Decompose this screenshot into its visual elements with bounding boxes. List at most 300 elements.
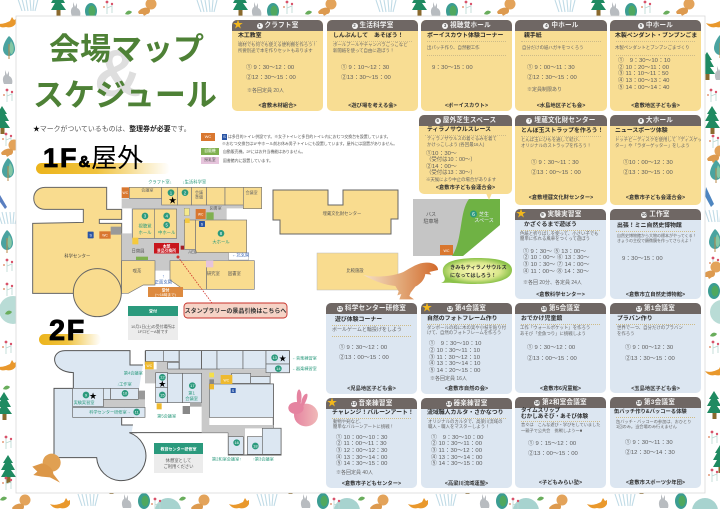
panel: 12 fourth meeting room: ③ 11：30～12：10 (429, 355, 480, 361)
panel: 8 large hall: ドッチビーディスクを使用して「ディスゲッ (615, 137, 701, 142)
panel: 16 second Japanese room: 16 (535, 400, 540, 404)
panel: 15 fifth meeting room: 第5会議室 (549, 305, 580, 312)
room labels: 視聴覚 (139, 222, 152, 229)
panel: 14 instrument room: ② 10：30～11：00 (431, 441, 482, 447)
1F: prize exchange box: 本部 (163, 244, 170, 248)
panel: 10 workshop: 10 (642, 212, 647, 216)
panel: 12 fourth meeting room: ダンボールの枠に木の実や小枝を貼り付 (427, 325, 506, 330)
numbered rooms: 17 (190, 383, 195, 388)
WC and facilities: S (89, 234, 92, 238)
room labels: 準備 (195, 194, 203, 200)
legend: は多目的トイレ併設です。※女子トイレと多目的トイレ内におむつ交換台を設置しています。 (228, 134, 391, 139)
callout: stamp rally: スタンプラリーの景品引換はこちらへ (185, 307, 286, 315)
panel: 18 third meeting room: <倉敷市スポーツ少年団> (626, 480, 685, 486)
room labels: 中ホール (158, 229, 176, 236)
heading: 2F (39, 315, 100, 347)
WC and facilities (88, 187, 249, 267)
panel: 1 craft room: 所要別途で本を作りセットもあります (238, 48, 313, 53)
panel: 11 science center training room: 遊び体験コーナー (335, 317, 382, 323)
panel: 6 outdoor lawn: （受付は13：30～） (426, 170, 476, 176)
panel: 12 fourth meeting room: ④ 13：30～14：10 (429, 361, 480, 367)
room labels: 第2和室会議室↑ (212, 456, 241, 462)
panel: 7 buried cultural property center: 7 (528, 118, 531, 122)
panel: 17 first meeting room: ②13：30～15：00 (625, 356, 675, 362)
panel: 14 instrument room: 流域職人カルタ・さかなつり (427, 410, 504, 416)
panel: 12 fourth meeting room: 第4会議室 (455, 305, 486, 312)
panel: 4 middle hall: ②12：30～15：00 (527, 75, 577, 81)
right strip (706, 17, 720, 27)
1F: reception note: 1FロビーA前です (138, 329, 168, 334)
legend: WC (205, 134, 211, 139)
map: outdoor lawn and bus parking: スペース (474, 218, 494, 224)
panel: 5 middle hall: 中ホール (646, 22, 673, 29)
panel: 16 second Japanese room: <子どもみらい塾> (539, 480, 582, 486)
panel: 9 experiment room: かざぐるまで遊ぼう (524, 222, 577, 228)
WC and facilities: WC (102, 234, 108, 238)
panel: 16 second Japanese room: 昔々は こんな遊び・学びをしていました (521, 422, 600, 427)
panel: 6 outdoor lawn (419, 115, 512, 200)
legend: 自動販売機。2Fにはお弁当機能はありません。 (223, 149, 305, 154)
map: outdoor lawn and bus parking: WC (444, 249, 450, 253)
panel: 13 music room: 動物や剣など、 (333, 419, 364, 424)
panel: 8 large hall (610, 115, 701, 205)
panel: 17 first meeting room (610, 303, 701, 393)
room labels (64, 178, 258, 285)
panel: 14 instrument room: ⑤ 14：30～15：00 (431, 461, 482, 467)
panel: 2 life science room: 新聞紙を使って自由に遊ぼう！ (333, 48, 394, 53)
panel: 13 music room: ② 11：00～11：30 (336, 441, 387, 447)
panel: 12 fourth meeting room: ★ (422, 303, 432, 314)
panel: 3 audiovisual hall: ボーイスカウト体験コーナー (427, 33, 503, 39)
panel: 12 fourth meeting room: <倉敷市自然の会> (445, 386, 488, 392)
room labels: 日替展 (132, 248, 145, 255)
left strip (0, 17, 16, 27)
panel: 8 large hall: <倉敷市子ども会連合会> (626, 195, 685, 201)
building: 埋蔵文化財センター (273, 190, 398, 234)
room labels: ↑第3会議室 (253, 456, 274, 462)
room labels: 会議室 (141, 186, 153, 192)
2F: rest room note: 教育センター研修室 (160, 446, 196, 452)
panel: 13 music room: ⑤ 14：30～15：00 (336, 461, 387, 467)
numbered rooms: 3 (144, 214, 147, 219)
panel: 16 second Japanese room: ① 9：15～12：00 (528, 441, 576, 447)
panel: 8 large hall: 8 (640, 118, 642, 122)
panel: 11 science center training room: ボールゲームと輪投げをしよう (332, 327, 402, 333)
numbered rooms: 4 (165, 214, 168, 219)
panel: 12 fourth meeting room: ② 10：30～11：10 (429, 348, 480, 354)
panel: 13 music room: ★ (327, 398, 337, 409)
panel: 10 workshop: <倉敷市立自然史博物館> (626, 292, 685, 298)
panel: 15 fifth meeting room: <倉敷市6児童館> (540, 386, 581, 392)
WC and facilities: S (232, 389, 235, 393)
map: outdoor lawn and bus parking: 6 (472, 212, 475, 218)
numbered rooms: ★ (89, 392, 97, 401)
panel: 17 first meeting room: を作ろう (617, 331, 635, 336)
panel: 1 craft room: クラフト室 (265, 22, 298, 29)
numbered rooms: ★ (169, 196, 177, 205)
panel: 16 second Japanese room: 第2和室会議室 (542, 399, 587, 406)
panel: 13 music room: <倉敷市子どもセンター> (342, 481, 401, 487)
panel: 1 craft room: 1 (258, 22, 261, 28)
panel: 13 music room: 音楽練習室 (359, 400, 392, 407)
panel: 9 experiment room: ★ (516, 209, 526, 220)
panel: 9 experiment room (515, 209, 606, 299)
title: ampersand watermark: & (94, 36, 142, 110)
panel: 4 middle hall: 親手紙 (524, 33, 542, 39)
panel: 5 middle hall: <倉敷地区子ども会> (631, 103, 680, 109)
speech bubble (441, 258, 512, 284)
science center wing (33, 187, 122, 317)
panel: 12 fourth meeting room (421, 303, 512, 394)
numbered rooms: 2 (184, 190, 187, 195)
numbered rooms: 13 (272, 355, 278, 360)
1F: reception box: (～16時まで) (155, 292, 176, 297)
room labels: 図書室 (210, 204, 222, 210)
panel: 4 middle hall (515, 20, 607, 111)
panel: 6 outdoor lawn: （受付は10：00～） (426, 157, 476, 163)
panel: 1 craft room: ※各回定員 20人 (247, 88, 284, 94)
panel: 5 middle hall: ④ 13：00～13：40 (618, 78, 669, 84)
1F: reception note: 受付 (149, 308, 157, 314)
panel: 15 fifth meeting room: 15 (541, 306, 546, 310)
panel: 1 craft room: 端材でも何でも使える便利棚を作ろう！ (238, 42, 317, 47)
panel: 2 life science room: 生活科学室 (360, 22, 393, 29)
panel: 2 life science room: ボールプールやチャンバラごっこなど (333, 42, 408, 47)
room labels (74, 354, 317, 462)
panel: 17 first meeting room: プラバン作り (617, 316, 653, 322)
panel: 9 experiment room: 9 (541, 212, 544, 216)
panel: 12 fourth meeting room: 自然のフォトフレーム作り (427, 316, 498, 322)
WC and facilities (138, 362, 236, 414)
room labels: 喫茶 (133, 267, 142, 274)
room labels: 大ホール (212, 238, 230, 245)
panel: 10 workshop: 自然史博物館から大物の標本がやってくる！ (617, 233, 697, 238)
panel: 9 experiment room: 簡単に作れる風車をつくって遊ぼう (520, 236, 590, 241)
panel: 15 fifth meeting room: ②13：00～15：00 (527, 356, 577, 362)
title: 会場マップ: 会場マップ (49, 32, 204, 67)
panel: 7 buried cultural property center: <倉敷埋蔵文化財センター> (529, 195, 593, 201)
panel: 11 science center training room: ① 9：30～12：00 (339, 345, 387, 351)
WC and facilities: WC (147, 364, 153, 368)
panel: 18 third meeting room: ②12：30～14：30 (625, 450, 675, 456)
numbered rooms: 11 (135, 409, 140, 414)
numbered rooms: 9 (85, 392, 88, 397)
callout: stamp rally (184, 303, 287, 318)
map: outdoor lawn and bus parking: バス (426, 212, 436, 218)
panel: 3 audiovisual hall (421, 20, 512, 111)
panel: 14 instrument room: ① 9：30～10：00 (431, 435, 483, 441)
numbered rooms: 8 (220, 231, 223, 236)
panel: 1 craft room: ① 9：30～12：00 (246, 65, 294, 71)
1F: reception box (148, 287, 183, 297)
speech bubble: になってはしろう！ (450, 272, 496, 279)
panel: 8 large hall: ニュースポーツ体験 (615, 128, 668, 134)
panel: 13 music room: ① 10：00～10：30 (336, 435, 387, 441)
panel: 13 music room: ※各回定員 40人 (336, 470, 373, 476)
panel: 6 outdoor lawn: ①10：30～ (426, 151, 457, 157)
numbered rooms (142, 189, 224, 237)
panel: 3 audiovisual hall: 視聴覚ホール (450, 22, 491, 29)
panel: 6 outdoor lawn: 6 (436, 118, 439, 122)
panel: 3 audiovisual hall: 3 (444, 22, 446, 28)
legend (201, 133, 397, 164)
room labels: AED (188, 249, 197, 254)
2F: rest room note: 休憩室として (166, 457, 191, 464)
panel: 3 audiovisual hall: <ボーイスカウト> (445, 103, 488, 109)
numbered rooms: ★ (279, 354, 287, 363)
panel: 6 outdoor lawn: 屋外芝生スペース (443, 117, 496, 124)
panel: 9 experiment room: ② 10：00～ ⑥ 13：30～ (523, 255, 589, 261)
panel: 12 fourth meeting room: ※各回定員 16人 (430, 376, 467, 382)
room labels: 第1 (188, 390, 196, 396)
numbered rooms: 15 (160, 392, 165, 397)
numbered rooms: 16 (234, 440, 240, 445)
panel: 8 large hall: ター」や「ラダーゲッター」をしよう (615, 143, 690, 148)
panel: 18 third meeting room: 缶バッチ・バッコーの参加は、おひとり (616, 419, 691, 424)
panel: 17 first meeting room: <玉島地区子ども会> (631, 386, 680, 392)
panel: 12 fourth meeting room: ⑤ 14：20～15：00 (429, 368, 480, 374)
panel: 10 workshop: 9：30～15：00 (622, 256, 663, 262)
panel: 15 fifth meeting room (515, 303, 606, 393)
panel: 16 second Japanese room: むかしあそび・あそび体験 (521, 414, 588, 420)
panel: 18 third meeting room (610, 397, 701, 488)
panel: 4 middle hall: ※定員制限あり (527, 87, 562, 93)
panel: 7 buried cultural property center: 埋蔵文化財センター (534, 117, 596, 124)
panel: 2 life science room: ① 9：10～12：30 (341, 65, 389, 71)
map: outdoor lawn and bus parking (413, 199, 500, 256)
top row (18, 0, 38, 11)
room labels: ↑ (162, 273, 164, 278)
room labels: ホール (139, 230, 152, 235)
panel: 7 buried cultural property center: ②13：00～15：00 (531, 170, 581, 176)
panel: 6 outdoor lawn: ティラノザウルスの着ぐるみを着て (427, 136, 497, 141)
room labels: 研究室 (207, 270, 220, 277)
panel: 14 instrument room: 14 (446, 400, 451, 406)
panel: 6 outdoor lawn: かけっこしよう (各回最16人) (427, 142, 484, 147)
1F: prize exchange box: 景品引換所 (157, 248, 176, 253)
panel: 5 middle hall (610, 20, 701, 111)
numbered rooms: 5 (165, 223, 168, 228)
panel: 11 science center training room: <児島地区子ども会> (347, 386, 396, 392)
panel: 4 middle hall: 4 (545, 22, 548, 28)
panel: 12 fourth meeting room: けて、自然のフォトフレームを作ろう (427, 330, 501, 335)
panel: 12 fourth meeting room: ① 9：30～10：10 (429, 341, 481, 347)
building: 比較施設: 比較施設 (346, 267, 364, 274)
panel: 8 large hall: 大ホール (646, 117, 673, 124)
numbered rooms: ★ (159, 380, 167, 389)
panel: 2 life science room: しんぶんして あそぼう！ (333, 33, 404, 39)
panel: 6 outdoor lawn: ②14：00～ (426, 164, 457, 170)
room labels: 正面玄関 (155, 278, 172, 285)
panel: 18 third meeting room: 第3会議室 (644, 399, 675, 406)
panel: 7 buried cultural property center: ① 9：30～11：30 (531, 160, 579, 166)
rooms (73, 351, 289, 454)
panel: 2 life science room: 2 (353, 22, 356, 28)
panel: 9 experiment room: ※各回 20分、各定員 24人 (523, 280, 582, 286)
panel: 7 buried cultural property center: とんぼ玉にひもを通して結び、 (521, 137, 582, 142)
WC and facilities: WC (224, 378, 230, 382)
panel: 4 middle hall: 中ホール (551, 22, 579, 29)
panel: 5 middle hall: ③ 11：10～11：50 (618, 71, 669, 77)
corridors (103, 362, 273, 454)
panel: 1 craft room: 木工教室 (238, 33, 262, 39)
panel: 10 workshop: きょうの主役で顕微鏡を作ってさらえよ！ (617, 238, 693, 243)
panel: 3 audiovisual hall: 出パッチ作り、自然観工作 (427, 45, 480, 50)
bottom row (12, 494, 30, 509)
panel: 14 instrument room: ③ 11：30～12：00 (431, 448, 482, 454)
map: outdoor lawn and bus parking: 駐車場 (423, 218, 439, 225)
room labels: 会議室 (185, 395, 198, 401)
panel: 2 life science room: ②13：30～15：00 (341, 75, 391, 81)
room labels: 実験実習室 (74, 399, 94, 405)
panel: 1 craft room: ②12：30～15：00 (246, 75, 296, 81)
arrow: dotted line to prize exchange (178, 257, 212, 303)
speech bubble: きみもティラノサウルス (450, 264, 507, 271)
legend: 図書館内に設置しています。 (223, 158, 273, 163)
panel: 3 audiovisual hall: 9：30～15：00 (432, 65, 473, 71)
panel: 6 outdoor lawn: <倉敷市子ども会連合会> (436, 185, 495, 191)
map: 2F floor plan (54, 351, 317, 481)
room labels: ←器楽練習室 (292, 365, 317, 371)
room labels: 科学センター (64, 253, 90, 260)
panel: 16 second Japanese room: ②13：00～15：00 (528, 451, 578, 457)
panel: 11 science center training room (326, 303, 417, 394)
corridor core (122, 198, 247, 271)
panel: 17 first meeting room: 世界で一つ、自分だけのプラバン (617, 325, 683, 330)
panel: 7 buried cultural property center: とんぼ玉ストラップを作ろう！ (521, 128, 603, 134)
map: 1F floor plan (33, 178, 262, 317)
panel: 18 third meeting room: 1回のみ。当会場のみ行えません (616, 424, 677, 429)
panel: 9 experiment room: 色紙と折りばしを使って、小さい子でも (520, 231, 599, 236)
panel: 2 life science room (327, 20, 418, 111)
legend: 授乳室 (204, 158, 216, 162)
panel: 17 first meeting room: 17 (636, 306, 641, 310)
room labels: 科学センター研修室→ (89, 408, 131, 414)
heading: 2F: 2F (49, 315, 86, 347)
panel: 14 instrument room: <高梁川流域連盟> (445, 481, 488, 487)
panel: 16 second Japanese room (515, 397, 606, 488)
panel: 9 experiment room: <倉敷科学センター> (536, 292, 585, 298)
panel: 13 music room: 13 (351, 400, 356, 406)
panel: 17 first meeting room: ① 9：00～12：30 (625, 345, 673, 351)
panel: 9 experiment room: ① 9：30～ ⑤ 13：00～ (523, 249, 586, 255)
panel: 14 instrument room (421, 398, 512, 488)
WC and facilities: S (201, 223, 204, 227)
panel: 13 music room (326, 398, 417, 488)
panel: 1 craft room: <倉敷木材組合> (259, 103, 296, 109)
panel: 16 second Japanese room: 〜親子で公共会 挑戦しよう〜■ (521, 428, 582, 433)
building: 埋蔵文化財センター: 埋蔵文化財センター (323, 210, 361, 217)
WC and facilities: WC (198, 212, 204, 216)
panel: 10 workshop: 出張！ミニ自然史博物館 (617, 223, 682, 229)
legend: ※おむつ交換台は1F中ホール前お休み男子トイレにも設置しています。屋外には設置がありません。 (222, 141, 397, 146)
building: 比較施設 (317, 253, 398, 290)
panel: 2 life science room: <遊び場を考える会> (348, 103, 397, 109)
panel: 6 outdoor lawn: ※天候により中止の場合があります (426, 177, 496, 182)
panel: 11 science center training room: 11 (338, 306, 342, 310)
1F: reception note: 10月1日(土)の受付場所は (131, 324, 175, 329)
panel: 15 fifth meeting room: ① 9：30～12：00 (527, 345, 575, 351)
panel: 13 music room: チャレンジ！バルーンアート！ (332, 410, 414, 416)
2F: rest room note (154, 443, 203, 473)
1F: reception box: 受付 (162, 288, 169, 292)
science center upper wing (54, 351, 289, 481)
room labels: 第4会議室 (124, 369, 143, 375)
panel: 4 middle hall: ① 9：00～11：30 (527, 65, 575, 71)
panel: 10 workshop: 工作室 (649, 211, 670, 218)
notice: ticket needed: ★マークがついているものは、整理券が必要です。 (33, 126, 191, 133)
numbered rooms: 1 (170, 190, 173, 195)
panel: 9 experiment room: ③ 10：30～ ⑦ 14：00～ (523, 262, 589, 268)
panel: 16 second Japanese room: タイムスリップ (521, 408, 560, 414)
numbered rooms: 12 (160, 375, 165, 380)
illustration: tyrannosaurus (363, 263, 438, 299)
numbered rooms: 14 (276, 366, 281, 371)
room labels: ↓生活科学室 (182, 178, 207, 185)
panel: 6 outdoor lawn: ティラノサウルスレース (427, 127, 491, 133)
panel: 15 fifth meeting room: 工作「ウォールポケット」を作ろう (520, 325, 590, 330)
room labels: 第5会議室 (157, 412, 176, 418)
room labels: 会議 (195, 189, 203, 195)
panel: 8 large hall: ②13：30～15：00 (623, 170, 673, 176)
illustration: pink rabbit (288, 389, 318, 426)
panel: 15 fifth meeting room: あそび「金魚つり」に挑戦しよう (520, 331, 586, 336)
room labels: ←音楽練習室 (292, 354, 317, 360)
panel: 4 middle hall: 自分だけの紙ハガキをつくろう (522, 45, 583, 50)
panel: 5 middle hall: 木製ペンダント・ブンブンごま (615, 33, 697, 39)
panel: 1 craft room (232, 20, 323, 111)
panel: 13 music room: ④ 13：30～14：00 (336, 455, 387, 461)
legend: 自販機 (204, 149, 216, 153)
panel: 1 craft room: ★ (233, 20, 243, 31)
panel: 14 instrument room: 器楽練習室 (454, 400, 487, 407)
panel: 9 experiment room: ④ 11：00～ ⑧ 14：30～ (523, 269, 589, 275)
panel: 18 third meeting room: ① 9：30～11：30 (625, 440, 673, 446)
panel: 11 science center training room: ②13：00～15：00 (339, 355, 389, 361)
panel: 7 buried cultural property center: オリジナルのストラップを作ろう！ (521, 143, 591, 148)
room labels: ←北玄関 (232, 252, 249, 259)
room labels: 会議室 (246, 189, 258, 195)
panel: 10 workshop (610, 209, 701, 299)
panel: 4 middle hall: <水島地区子ども会> (537, 103, 585, 109)
WC and facilities: WC (123, 191, 129, 195)
panel: 5 middle hall: ① 9：30～10：10 (618, 58, 670, 64)
room labels: 図書室 (228, 270, 241, 277)
panel: 13 music room: 簡単なバルーンアートに挑戦！ (333, 424, 394, 429)
2F: rest room note: ご利用ください (163, 463, 194, 470)
panel: 5 middle hall: 5 (640, 22, 642, 28)
room labels: クラフト室↓ (148, 178, 172, 185)
panel: 18 third meeting room: 18 (636, 400, 641, 404)
heading: 1F & outdoors: 1F&屋外 (43, 143, 143, 173)
numbered rooms: 10 (123, 391, 128, 396)
room labels: ↓工作室 (117, 380, 132, 386)
panel: 17 first meeting room: 第1会議室 (644, 305, 675, 312)
panel: 7 buried cultural property center (515, 115, 607, 205)
rooms (122, 187, 262, 293)
map: outdoor lawn and bus parking: 芝生 (479, 211, 489, 218)
panel: 11 science center training room: 科学センター研修室 (345, 305, 406, 312)
title: スケジュール: スケジュール (33, 78, 217, 113)
panel: 14 instrument room: オリジナルのカルタで、高梁川流域の (428, 419, 502, 424)
panel: 14 instrument room: ④ 13：30～14：00 (431, 455, 482, 461)
panel: 5 middle hall: 木製ペンダントとブンブンごまづくり (615, 45, 690, 50)
1F: prize exchange box (154, 243, 179, 254)
panel: 12 fourth meeting room: 12 (447, 306, 452, 310)
panel: 8 large hall: ①10：00～12：30 (623, 160, 673, 166)
panel: 15 fifth meeting room: おでかけ児童館 (521, 316, 562, 322)
panel: 18 third meeting room: 缶バッチ作り&バッコーる体験 (614, 409, 687, 415)
